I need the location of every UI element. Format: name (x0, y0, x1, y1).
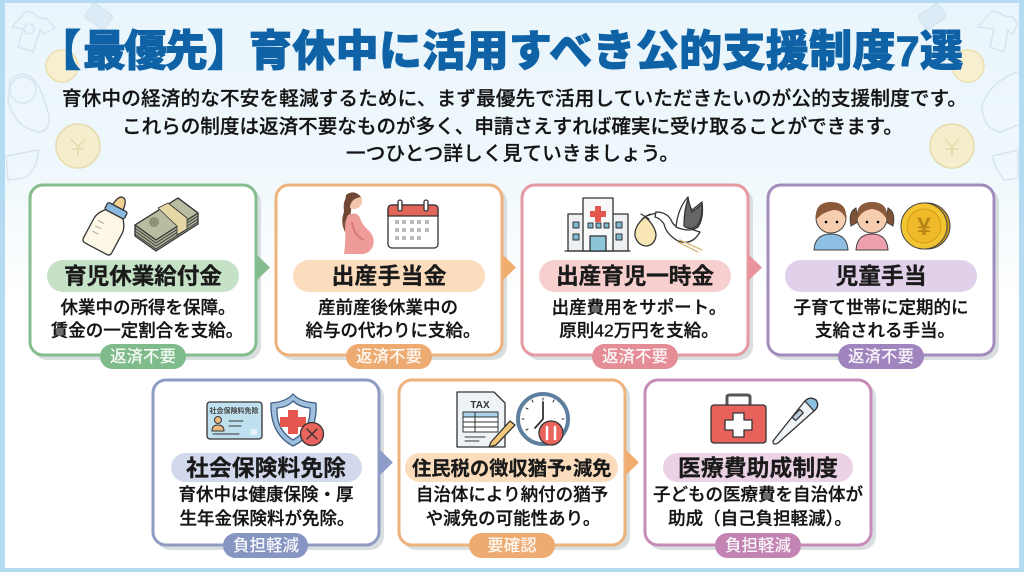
badge (715, 533, 801, 558)
icon: insurance card (207, 402, 262, 439)
description: 子育て世帯に定期的に (794, 298, 968, 318)
description: 子どもの医療費を自治体が (653, 484, 863, 504)
icon: calendar (388, 200, 438, 248)
description: 生年金保険料が免除。 (180, 508, 354, 528)
icon: baby bottle (82, 190, 137, 256)
intro text: これらの制度は返済不要なものが多く、申請さえすれば確実に受け取ることができます。 (122, 116, 903, 138)
description (794, 298, 968, 340)
badge: 要確認 (487, 536, 537, 555)
pill heading: 出産育児一時金 (556, 263, 714, 289)
icon: girl (850, 202, 894, 250)
decorative background pattern (6, 3, 1018, 180)
arrow (503, 255, 516, 280)
pill heading: ・ (559, 459, 578, 480)
icon: hospital (565, 198, 630, 251)
icon: stork with bundle (635, 197, 702, 252)
arrow (257, 255, 270, 280)
panel: 出産育児一時金 (522, 185, 753, 369)
badge (223, 533, 308, 558)
pill heading (293, 260, 485, 292)
description: 助成（自己負担軽減）。 (668, 508, 852, 528)
icon: tax document: TAX (470, 400, 490, 411)
badge (100, 344, 186, 369)
panel: 出産手当金 (276, 185, 507, 369)
description (306, 298, 480, 340)
pill heading: 育児休業給付金 (64, 263, 222, 289)
description: 自治体により納付の猶予 (416, 484, 608, 504)
panel: 育児休業給付金 (30, 185, 261, 369)
icon: tax document (457, 392, 515, 447)
intro text (62, 88, 967, 165)
title: 】 (207, 28, 250, 76)
panel: 医療費助成制度 (645, 380, 876, 558)
icon: thermometer (773, 398, 818, 444)
description: 賃金の一定割合を支給。 (51, 320, 243, 340)
pill heading: 児童手当 (836, 263, 926, 289)
badge: 負担軽減 (725, 536, 792, 555)
panel: 社会保険料免除 (153, 380, 384, 558)
icon: pregnant woman (342, 192, 374, 254)
badge (592, 344, 678, 369)
arrow (749, 255, 762, 280)
pill heading: 減免 (573, 457, 612, 480)
panel: 住民税の徴収猶予・減免 (399, 380, 630, 558)
description: 支給される手当。 (815, 320, 955, 340)
icon: boy (814, 202, 848, 250)
description: 給与の代わりに支給。 (306, 320, 480, 340)
title: 育休中に活用すべき公的支援制度7選 (249, 28, 963, 76)
description: 産前産後休業中の (318, 298, 458, 318)
badge: 返済不要 (602, 347, 668, 366)
description (416, 484, 608, 528)
pill heading: 医療費助成制度 (678, 455, 838, 481)
intro text: 育休中の経済的な不安を軽減するために、まず最優先で活用していただきたいのが公的支援制度です。 (62, 88, 967, 110)
icon: yen coin: ¥ (917, 213, 931, 241)
pill heading: 出産手当金 (332, 263, 447, 289)
icon: yen coin (901, 203, 950, 249)
description (552, 298, 726, 340)
badge: 返済不要 (356, 347, 422, 366)
pill heading (785, 260, 977, 292)
icon: clock with pause (518, 394, 568, 445)
pill heading (405, 453, 618, 482)
pill heading (539, 260, 731, 292)
description: や減免の可能性あり。 (426, 508, 600, 528)
badge (346, 344, 432, 369)
icon: banknote stack (135, 198, 198, 251)
pill heading: 社会保険料免除 (186, 455, 346, 481)
badge (838, 344, 924, 369)
badge: 負担軽減 (233, 536, 300, 555)
description: 休業中の所得を保障。 (60, 298, 236, 318)
title: 最優先 (83, 28, 208, 76)
description: 出産費用をサポート。 (552, 298, 726, 318)
description: 原則42万円を支給。 (559, 320, 719, 340)
badge (469, 533, 555, 558)
intro text: 一つひとつ詳しく見ていきましょう。 (346, 143, 679, 165)
title: 【 (38, 28, 81, 76)
description (653, 484, 863, 528)
arrow (380, 450, 393, 475)
icon: shield with cross (271, 394, 324, 446)
pill heading (47, 260, 239, 292)
icon: insurance card: 社会保険料免除 (210, 406, 258, 415)
badge: 返済不要 (110, 347, 176, 366)
description: 育休中は健康保険・厚 (178, 484, 354, 504)
icon: first aid kit (711, 395, 766, 443)
pill heading: 住民税の徴収猶予 (412, 458, 566, 480)
badge: 返済不要 (848, 347, 914, 366)
description (178, 484, 354, 528)
panel: 児童手当 (768, 185, 999, 369)
arrow (626, 450, 639, 475)
description (51, 298, 243, 340)
